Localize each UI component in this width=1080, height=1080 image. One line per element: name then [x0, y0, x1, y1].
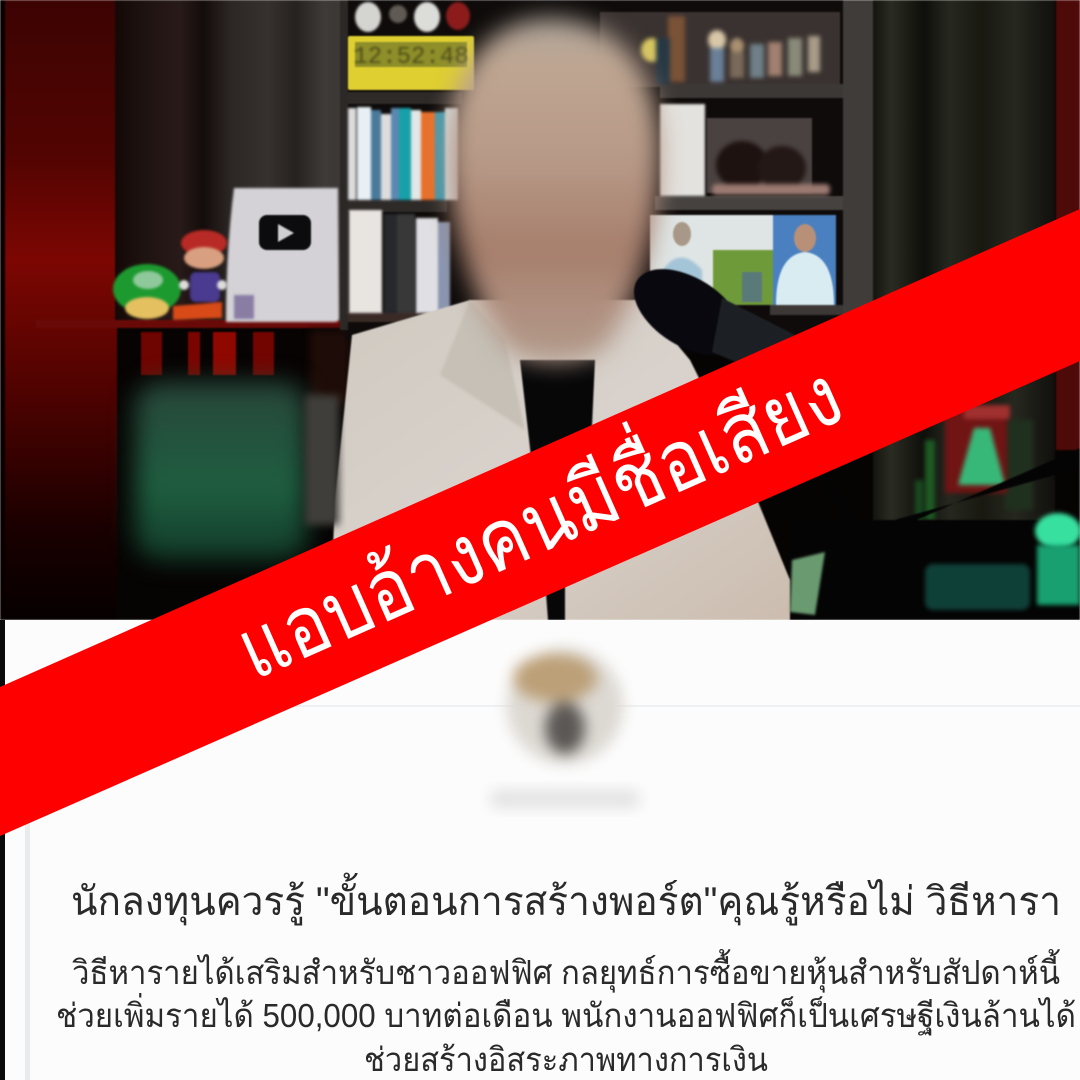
wall shelf with red slats [36, 320, 350, 405]
watches on top shelf [355, 2, 470, 32]
green and red figure [945, 405, 1010, 493]
white books next to head [660, 104, 705, 196]
panel: blurred Facebook ad screenshot [0, 620, 1080, 1080]
blurred profile picture [507, 648, 623, 764]
bookcase [340, 0, 873, 340]
green device on desk [925, 564, 1030, 610]
ad body text [56, 949, 1076, 1078]
small green book [790, 552, 825, 615]
blurred green object [135, 382, 307, 560]
green reflections on curtain [915, 420, 1033, 530]
books row two [349, 210, 450, 313]
ad body text: ช่วยสร้างอิสระภาพทางการเงิน [364, 1041, 768, 1078]
banner title: แอบอ้างคนมีชื่อเสียง [219, 338, 855, 697]
right dark curtain [873, 0, 1055, 520]
ad headline: นักลงทุนควรรู้ "ขั้นตอนการสร้างพอร์ต"คุณรู้หรือไม่ วิธีหารา [71, 872, 1061, 926]
lower desk shadow [790, 520, 1080, 620]
green glowing lamp [1035, 513, 1080, 605]
microphone [619, 251, 795, 373]
blurred face of presenter [448, 18, 660, 362]
dark curtain behind shelf [115, 0, 347, 325]
photo frames [650, 215, 836, 305]
left red curtain [0, 0, 117, 620]
books row one [348, 107, 458, 200]
yellow digital clock: 12:52:48 [353, 44, 469, 71]
icon: Mario toy [173, 230, 227, 320]
microphone boom arm [818, 448, 1080, 545]
icon: silver play button plaque [226, 188, 339, 322]
dark figurine [712, 141, 830, 195]
yellow digital clock [348, 36, 474, 90]
blurred profile name [490, 790, 640, 808]
icon: green mushroom toy [113, 264, 181, 319]
panel: video screenshot of the impersonated presenter [0, 0, 1080, 620]
right red curtain [1056, 0, 1080, 450]
presenter blazer [305, 300, 790, 620]
toy figures on shelf [641, 16, 820, 84]
